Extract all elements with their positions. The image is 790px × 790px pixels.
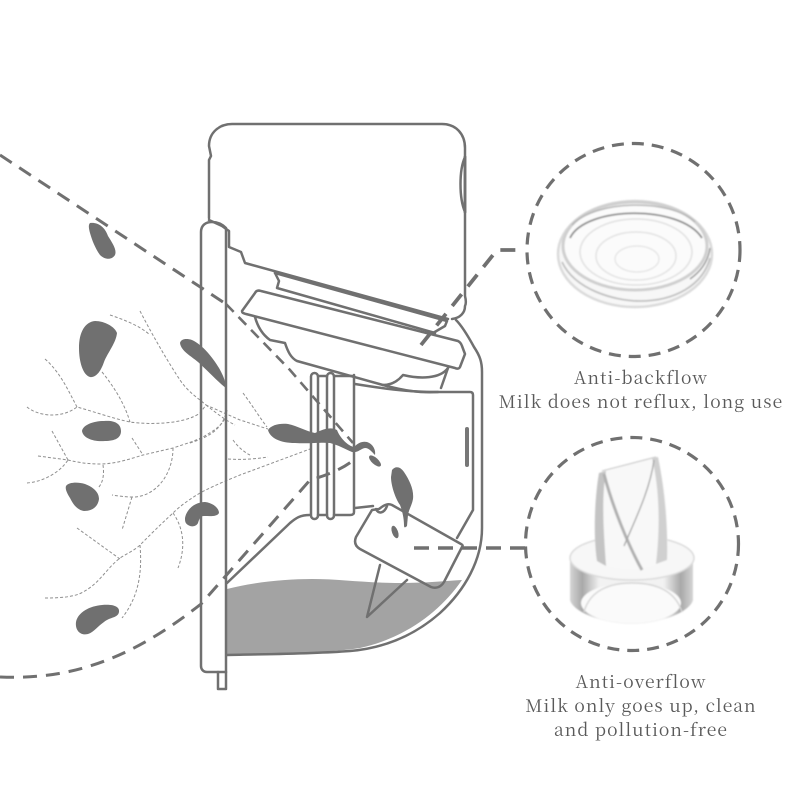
inner chamber bbox=[227, 515, 310, 583]
caption: anti-overflow: Anti-overflow bbox=[575, 669, 707, 694]
milk duct cone dashed outline bbox=[0, 155, 351, 677]
caption: anti-backflow bbox=[499, 365, 783, 414]
flange plate bbox=[201, 222, 226, 689]
vessels network bbox=[27, 311, 310, 618]
callout circle: anti-overflow bbox=[526, 438, 738, 650]
indicator bar bbox=[465, 427, 469, 467]
caption: anti-overflow: Milk only goes up, clean bbox=[525, 693, 757, 718]
caption: anti-backflow: Anti-backflow bbox=[574, 365, 708, 390]
milk droplets bbox=[66, 223, 413, 634]
icon: duckbill valve bbox=[570, 457, 694, 624]
seal layers bbox=[275, 273, 435, 333]
callout circle: anti-backflow bbox=[527, 144, 740, 356]
outer body right bbox=[227, 320, 482, 655]
milk level bbox=[227, 579, 462, 655]
device outline bbox=[201, 124, 482, 689]
caption: anti-backflow: Milk does not reflux, long use bbox=[499, 389, 783, 414]
icon: transparent disc bbox=[558, 201, 712, 307]
caption: anti-overflow bbox=[525, 669, 757, 742]
leader lines bbox=[414, 250, 525, 548]
tilted membrane disk bbox=[242, 291, 465, 369]
top housing bbox=[209, 124, 466, 319]
valve body bbox=[355, 504, 463, 588]
caption: anti-overflow: and pollution-free bbox=[554, 717, 728, 742]
